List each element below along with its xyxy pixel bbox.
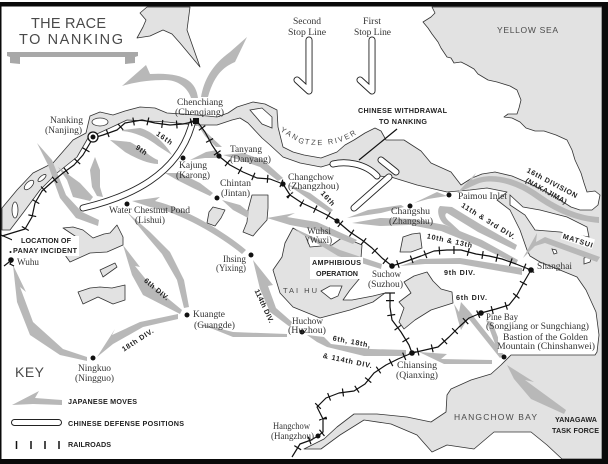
Chinese defense position: diagonal line <box>354 177 389 208</box>
city labels: Paimou Inlet <box>458 191 507 201</box>
title: THE RACE <box>31 16 106 32</box>
city labels: Ningkuo <box>78 363 111 373</box>
city labels: Hangchow <box>273 421 310 431</box>
Chinese defense position: Second Stop Line <box>297 40 309 91</box>
lake north of Suchow <box>400 233 422 252</box>
arrow: amphibious operation <box>294 228 382 269</box>
Yanagawa Task Force label <box>552 415 599 435</box>
city labels: Water Chestnut Pond <box>109 205 190 215</box>
water names <box>282 25 558 422</box>
Yanagawa Task Force label: TASK FORCE <box>552 426 599 435</box>
water names: HANGCHOW BAY <box>454 412 537 422</box>
key: Chinese defense positions: CHINESE DEFENSE POSITIONS <box>68 419 184 428</box>
division labels: (NAKAJIMA) <box>524 176 569 206</box>
railroads <box>2 120 531 457</box>
division labels: 6th DIV. <box>456 293 487 302</box>
city labels: (Suzhou) <box>368 279 403 289</box>
arrow: Yanagawa landing <box>507 365 566 414</box>
arrow: 18th Division <box>97 314 178 357</box>
division labels: 11th & 3rd DIV. <box>460 201 517 241</box>
city labels: (Karong) <box>176 170 210 180</box>
Chinese withdrawal label <box>358 106 448 126</box>
city labels: (Zhangshu) <box>389 216 433 226</box>
large lake east of Chintan <box>243 195 268 236</box>
city labels: Wuhsi <box>307 226 331 236</box>
key: Chinese defense positions <box>12 419 184 428</box>
city labels: (Qianxing) <box>396 370 438 380</box>
city labels: (Wuxi) <box>307 235 332 245</box>
arrow: 9th Division <box>400 258 522 275</box>
arrow: to Water Chestnut Pond <box>132 197 246 254</box>
stop line labels: First <box>363 16 381 26</box>
division labels: 9th <box>134 143 149 157</box>
Chinese defense position: arc before Nanking <box>83 124 192 208</box>
arrow: Chenchiang northwest <box>122 65 198 98</box>
Amphibious Operation label: OPERATION <box>316 269 358 278</box>
city labels: (Yixing) <box>216 263 246 273</box>
arrow: Bastion to Chiansing <box>419 352 492 364</box>
city labels: Suchow <box>372 269 401 279</box>
Tai Hu island <box>321 286 342 299</box>
city labels: (Jintan) <box>221 188 250 198</box>
arrow: to Chintan <box>222 200 249 218</box>
lake east of Suchow <box>399 272 453 329</box>
stop line labels: Second <box>293 16 321 26</box>
key heading: KEY <box>15 364 45 380</box>
arrow: Matsui <box>523 233 600 262</box>
division labels: 18th DIV. <box>120 326 155 353</box>
city labels: Changchow <box>288 172 334 182</box>
Chinese defense position: First Stop Line <box>360 40 372 91</box>
arrow: Wuhsi to Chintan lake <box>267 213 357 244</box>
division labels: 114th DIV. <box>253 288 276 324</box>
arrow: to Kajung from Tanyang <box>190 150 217 160</box>
pointer: Chinese withdrawal <box>359 129 397 160</box>
arrow: 9th Division to Nanking <box>110 140 158 164</box>
arrow: north toward Nanking <box>90 157 103 197</box>
water names: TAI HU <box>283 286 317 295</box>
division labels: 9th DIV. <box>444 268 475 277</box>
Amphibious Operation label: AMPHIBIOUS <box>312 258 361 267</box>
arrow: 10th and 13th band <box>352 218 518 264</box>
city labels: Ihsing <box>223 254 246 264</box>
city labels: Kuangte <box>193 309 225 319</box>
key: Japanese moves <box>12 391 137 406</box>
water names: YANGTZE RIVER <box>282 126 356 146</box>
city labels: (Zhangzhou) <box>288 181 339 191</box>
city labels: Nanking <box>50 115 83 125</box>
city labels: (Nanjing) <box>45 125 82 135</box>
Yanagawa Task Force label: YANAGAWA <box>555 415 597 424</box>
arrow: Kajung <box>165 173 213 196</box>
Chinese withdrawal label: CHINESE WITHDRAWAL <box>358 106 448 115</box>
city markers <box>8 118 534 438</box>
city labels: Bastion of the Golden <box>503 332 588 342</box>
lake near Chintan <box>207 207 225 226</box>
key: railroads <box>16 440 111 449</box>
arrow: Paimou to Changshu <box>414 192 447 203</box>
key: Japanese moves: JAPANESE MOVES <box>68 397 137 406</box>
city labels: (Hangzhou) <box>271 431 314 441</box>
stop line labels <box>288 16 391 37</box>
key <box>12 364 184 449</box>
title <box>19 16 123 48</box>
arrow: Bastion to Pine Bay <box>486 320 503 354</box>
city labels: Changshu <box>391 206 430 216</box>
title banner <box>7 52 138 64</box>
city labels: Huchow <box>292 316 323 326</box>
arrow: 16th Division to Nanking <box>122 128 172 155</box>
division labels: 16th <box>319 189 337 208</box>
arrow: 6th Division from Bastion, west head <box>454 302 504 358</box>
pointer: Panay incident <box>1 235 17 242</box>
division labels: 16th DIVISION <box>525 166 579 200</box>
arrow: Chenchiang northeast <box>201 37 247 97</box>
Location of Panay Incident label: PANAY INCIDENT <box>13 246 78 255</box>
arrow: 16th to Changchow <box>288 185 333 213</box>
Chinese defense position: estuary line <box>333 163 377 176</box>
city labels: (Chenqiang) <box>175 107 224 117</box>
stop line labels: Stop Line <box>354 27 391 37</box>
division labels: 16th <box>154 129 174 147</box>
arrow: 16th Division Nakajima <box>457 173 599 223</box>
city labels: (Ningguo) <box>75 373 114 383</box>
key: railroads: RAILROADS <box>68 440 111 449</box>
city labels: Chenchiang <box>177 97 223 107</box>
water names: YELLOW SEA <box>497 25 558 35</box>
city labels: Kajung <box>179 160 207 170</box>
city labels: Chiansing <box>397 360 437 370</box>
arrow: Kuangte to Water Chestnut Pond <box>127 212 189 308</box>
arrow: 6th Division <box>123 245 182 314</box>
arrow: Kuangte to Huchow <box>193 322 287 337</box>
division labels: 6th DIV. <box>142 276 171 302</box>
Amphibious Operation label <box>310 257 363 279</box>
city labels: Shanghai <box>537 261 572 271</box>
Chinese defense position: river capsule <box>381 160 396 172</box>
division labels: 6th, 18th, <box>332 334 371 350</box>
division labels <box>120 129 595 370</box>
Location of Panay Incident label: LOCATION OF <box>21 236 72 245</box>
city labels: (Guangde) <box>194 320 235 330</box>
stop line labels: Stop Line <box>288 27 326 37</box>
city labels: Wuhu <box>17 257 39 267</box>
city labels: (Songjiang or Sungchiang) <box>486 321 589 331</box>
arrow: Changshu to Changchow <box>347 205 404 218</box>
city labels: Mountain (Chinshanwei) <box>497 341 595 351</box>
lake north of Location label <box>63 225 123 262</box>
division labels: & 114th DIV. <box>322 351 373 370</box>
arrow: 11th and 3rd hairpin <box>438 206 517 250</box>
city labels: (Lishui) <box>135 215 165 225</box>
city labels <box>17 97 596 441</box>
arrow: northwest toward Yangtze <box>58 167 93 201</box>
city labels: Pine Bay <box>486 312 518 322</box>
division labels: 10th & 13th <box>426 231 473 250</box>
arrow: Changchow to Tanyang <box>223 153 283 181</box>
northern lake <box>137 7 200 67</box>
arrow: to Wuhu <box>13 265 87 361</box>
arrow: 6th, 18th and 114th Division <box>307 335 406 356</box>
title: TO NANKING <box>19 32 123 48</box>
city labels: Chintan <box>220 178 251 188</box>
city labels: (Danyang) <box>230 154 271 164</box>
Location of Panay Incident label <box>10 236 79 256</box>
arrow: 114th Division <box>253 260 292 327</box>
division labels: MATSUI <box>562 232 594 250</box>
Chinese withdrawal label: TO NANKING <box>379 117 427 126</box>
arrow: Chenchiang rail 16th <box>197 124 222 147</box>
small lake <box>100 263 117 277</box>
city labels: Tanyang <box>230 144 262 154</box>
arrow: long western flank <box>37 143 99 226</box>
Tai Hu lake <box>273 228 385 318</box>
city labels: (Huzhou) <box>288 325 326 335</box>
Yangtze estuary islands <box>12 108 592 264</box>
lake south of 6th Div <box>78 285 125 304</box>
